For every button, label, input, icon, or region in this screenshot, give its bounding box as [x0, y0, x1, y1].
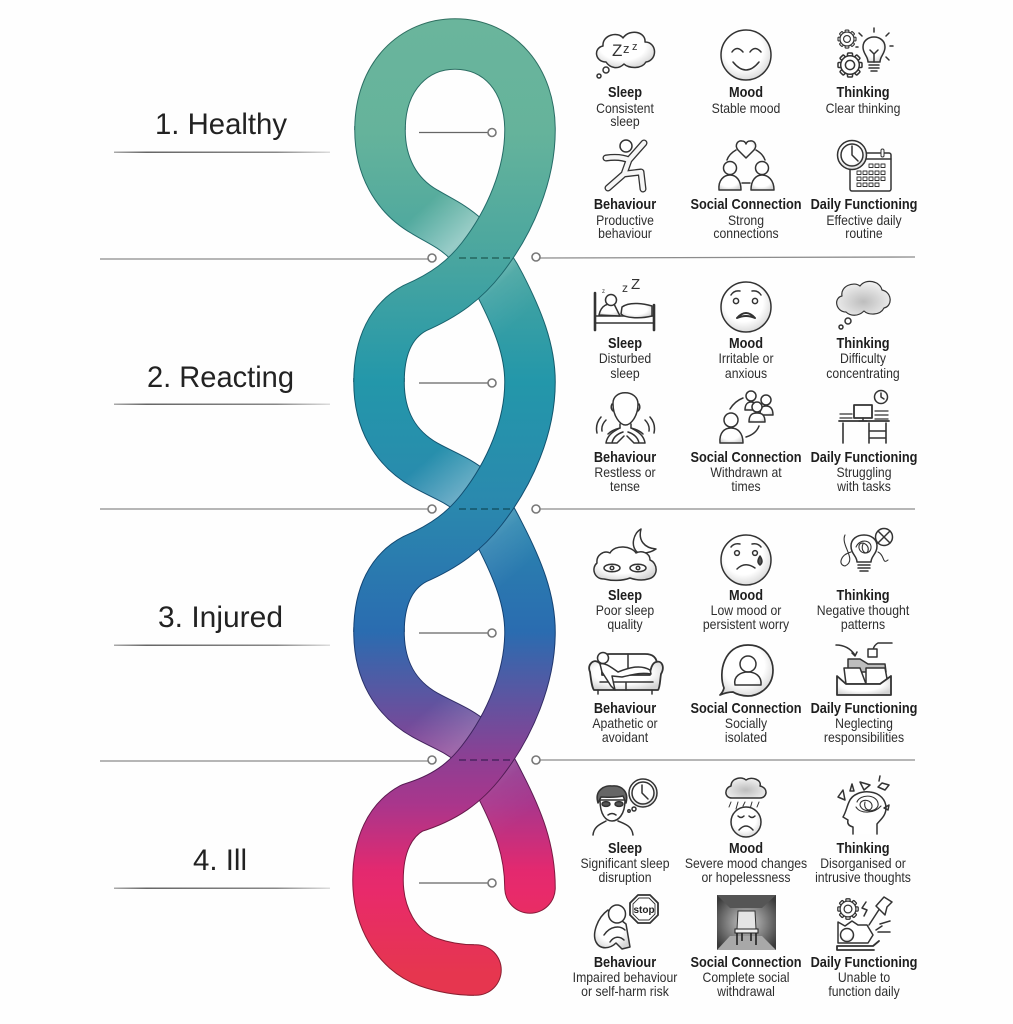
icon: overflowing folders — [836, 643, 892, 695]
text: daily functioning — [811, 448, 917, 494]
icon: two people with heart — [719, 141, 774, 190]
text: mood: Mood — [729, 839, 763, 856]
text: behaviour — [573, 953, 678, 999]
text: sleep — [599, 334, 651, 381]
text: thinking: patterns — [841, 616, 885, 632]
icon: foggy thought cloud — [837, 281, 890, 329]
panel: stage 3 Injured — [589, 528, 917, 745]
text: sleep: disruption — [598, 869, 652, 885]
text: mood: Severe mood changes — [685, 855, 807, 871]
text: social connection: Social Connection — [690, 953, 802, 970]
icon: sleep cloud: z — [632, 41, 638, 53]
text: mood: persistent worry — [703, 616, 790, 632]
text: behaviour: Apathetic or — [592, 715, 658, 731]
panel: stage 4 Ill — [573, 776, 917, 999]
text: daily functioning: Neglecting — [835, 715, 893, 731]
text: daily functioning: Daily Functioning — [811, 448, 917, 465]
icon: disturbed sleep bed — [595, 276, 654, 330]
text: social connection — [690, 195, 802, 241]
text: mood: anxious — [725, 365, 767, 381]
text: social connection: Strong — [728, 212, 764, 228]
icon: isolated person in speech bubble — [720, 645, 773, 696]
text: mood: or hopelessness — [701, 869, 791, 885]
text: sleep: Significant sleep — [580, 855, 670, 871]
text: thinking: Clear thinking — [826, 100, 900, 116]
text: daily functioning: Daily Functioning — [811, 699, 917, 716]
text: thinking: Thinking — [836, 586, 890, 603]
text: behaviour: Behaviour — [594, 699, 657, 716]
text: behaviour: behaviour — [598, 225, 653, 241]
text: sleep: Sleep — [608, 839, 642, 856]
text: mood: Mood — [729, 586, 763, 603]
crossing dashes — [459, 258, 512, 760]
text: sleep — [580, 839, 670, 885]
double helix ribbon — [378, 44, 530, 970]
text: behaviour: Behaviour — [594, 195, 657, 212]
text: daily functioning: responsibilities — [824, 729, 904, 745]
text: daily functioning: Struggling — [836, 464, 892, 480]
text: social connection: Social Connection — [690, 699, 802, 716]
divider lines — [100, 257, 915, 761]
icon: cluttered desk — [839, 390, 889, 443]
text: sleep: Consistent — [596, 100, 654, 116]
text: thinking: intrusive thoughts — [815, 869, 911, 885]
text: thinking: Thinking — [836, 83, 890, 100]
panel: stage 1 Healthy — [594, 28, 917, 241]
text: mood: Stable mood — [712, 100, 780, 116]
text: behaviour: Behaviour — [594, 953, 657, 970]
text: social connection: times — [731, 478, 761, 494]
icon: gears and light bulb — [838, 28, 893, 77]
icon: person on sofa — [589, 652, 663, 694]
front strands — [378, 44, 530, 970]
icon: open eyes cloud and moon — [594, 529, 656, 580]
icon: restless person — [596, 393, 654, 443]
text: behaviour: avoidant — [602, 729, 649, 745]
text: social connection: Complete social — [703, 969, 789, 985]
text: social connection: connections — [713, 225, 779, 241]
text: social connection: Social Connection — [690, 195, 802, 212]
text: thinking — [817, 586, 910, 632]
text: thinking: concentrating — [826, 365, 900, 381]
text: social connection: Socially — [725, 715, 768, 731]
text: daily functioning: Unable to — [838, 969, 890, 985]
text: daily functioning: Daily Functioning — [811, 195, 917, 212]
icon: head with tangled thoughts — [838, 776, 889, 834]
text: daily functioning: with tasks — [836, 478, 891, 494]
icon: clock and calendar — [838, 140, 891, 191]
text: social connection: isolated — [725, 729, 767, 745]
icon: empty dark room with chair — [717, 895, 776, 950]
text: behaviour — [594, 195, 657, 241]
text: mood: Mood — [729, 334, 763, 351]
icon: disturbed sleep bed: z — [602, 289, 605, 295]
text: thinking: Disorganised or — [820, 855, 906, 871]
text: thinking — [815, 839, 911, 885]
text: mood — [685, 839, 807, 885]
icon: disturbed sleep bed: Z — [631, 276, 640, 293]
text: behaviour: or self-harm risk — [581, 983, 669, 999]
text: thinking — [826, 334, 900, 381]
text: daily functioning — [811, 953, 917, 999]
text: sleep — [596, 83, 654, 129]
text: sleep: Sleep — [608, 586, 642, 603]
icon: sleep cloud — [597, 32, 655, 78]
text: daily functioning: Daily Functioning — [811, 953, 917, 970]
text: sleep: Sleep — [608, 334, 642, 351]
text: thinking: Negative thought — [817, 602, 910, 618]
text: sleep: Sleep — [608, 83, 642, 100]
icon: person apart from group — [720, 391, 773, 443]
text: behaviour: tense — [610, 478, 640, 494]
text: behaviour: Productive — [596, 212, 654, 228]
text: social connection — [690, 953, 802, 999]
text: mood — [703, 586, 790, 632]
icon: running figure — [606, 140, 644, 189]
heading: 4. Ill: 4. Ill — [193, 844, 247, 877]
text: mood — [712, 83, 780, 116]
text: mood: Irritable or — [718, 350, 774, 366]
icon: rain cloud over sad face — [726, 778, 766, 837]
text: sleep: Disturbed — [599, 350, 651, 366]
text: daily functioning — [811, 195, 917, 241]
text: social connection: Social Connection — [690, 448, 802, 465]
icon: sleep cloud: Z — [612, 41, 622, 60]
icon: crying face — [721, 535, 771, 585]
text: behaviour: Impaired behaviour — [573, 969, 678, 985]
text: social connection: Withdrawn at — [710, 464, 782, 480]
text: behaviour — [594, 448, 657, 494]
icon: disturbed sleep bed: z — [622, 281, 628, 295]
text: social connection — [690, 699, 802, 745]
text: sleep: sleep — [610, 113, 640, 129]
icon: broken machine with gear and hammer — [837, 897, 892, 950]
text: sleep — [596, 586, 654, 632]
text: sleep: quality — [607, 616, 643, 632]
icon: curled person and stop sign — [595, 895, 658, 949]
icon: sleep cloud: z — [623, 41, 630, 56]
text: daily functioning: routine — [845, 225, 883, 241]
text: behaviour — [592, 699, 658, 745]
text: thinking: Difficulty — [840, 350, 887, 366]
text: mood: Low mood or — [711, 602, 782, 618]
text: daily functioning: Effective daily — [826, 212, 902, 228]
text: sleep: Poor sleep — [596, 602, 654, 618]
heading: 2. Reacting: 2. Reacting — [147, 361, 294, 394]
back strands — [379, 126, 530, 970]
icon: tangled light bulb — [841, 528, 892, 571]
text: mood — [718, 334, 774, 381]
text: thinking: Thinking — [836, 839, 890, 856]
text: mood: Mood — [729, 83, 763, 100]
icon: sleepless person with clock — [593, 779, 657, 835]
text: thinking — [826, 83, 900, 116]
nodes and pointer lines — [419, 128, 540, 887]
panel: stage 2 Reacting — [594, 276, 917, 494]
text: social connection: withdrawal — [716, 983, 775, 999]
text: daily functioning: function daily — [828, 983, 900, 999]
text: social connection — [690, 448, 802, 494]
text: sleep: sleep — [610, 365, 640, 381]
icon: curled person and stop sign: stop — [633, 905, 655, 916]
text: daily functioning — [811, 699, 917, 745]
text: behaviour: Behaviour — [594, 448, 657, 465]
icon: anxious face — [721, 282, 771, 332]
text: thinking: Thinking — [836, 334, 890, 351]
icon: smiling face — [721, 30, 771, 80]
heading: 1. Healthy: 1. Healthy — [155, 108, 287, 141]
text: behaviour: Restless or — [594, 464, 656, 480]
heading: 3. Injured: 3. Injured — [158, 601, 283, 634]
